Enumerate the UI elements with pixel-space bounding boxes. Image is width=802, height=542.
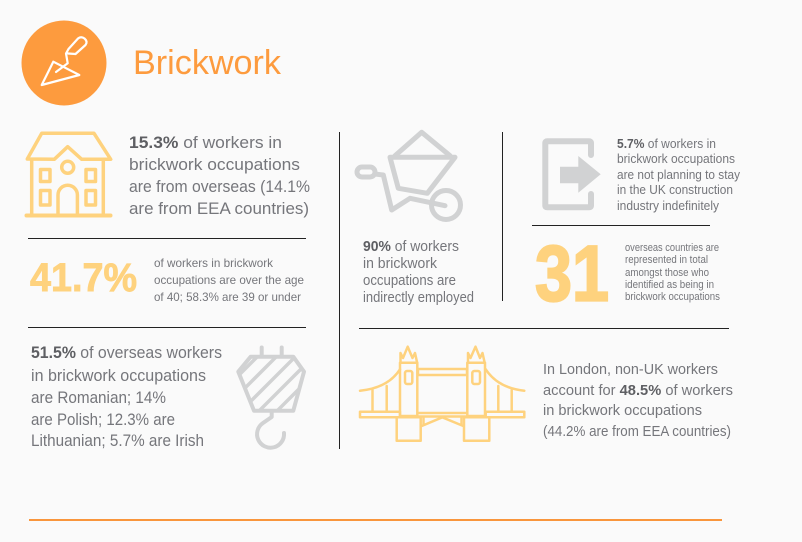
- text: age over 40: of 40; 58.3% are 39 or under: [154, 290, 301, 304]
- text: London non-UK workers: (44.2% are from EEA countries): [543, 424, 731, 440]
- text: 5.7% not staying: in the UK construction: [617, 183, 733, 197]
- icon: exit arrow: [545, 141, 601, 207]
- text: 15.3% from overseas: are from EEA countries): [129, 200, 309, 218]
- text: 51.5% of overseas workers: [31, 343, 222, 450]
- text: 90% indirectly employed: occupations are: [363, 273, 456, 289]
- text: 5.7% not staying: are not planning to stay: [617, 168, 741, 182]
- panel: overseas countries: [535, 228, 720, 318]
- text: 90% indirectly employed: 90% of workers: [363, 239, 459, 255]
- big number 31: 31: [535, 228, 609, 318]
- text: 90% indirectly employed: [363, 239, 474, 306]
- text: 51.5% of overseas workers: 51.5% of overseas workers: [31, 343, 222, 362]
- text: London non-UK workers: In London, non-UK workers: [543, 362, 718, 378]
- text: London non-UK workers: [543, 362, 733, 440]
- text: 15.3% from overseas: 15.3% of workers in: [129, 134, 282, 152]
- icon: Tower Bridge: [360, 347, 524, 441]
- text: age over 40: occupations are over the age: [154, 273, 304, 287]
- text: countries represented: amongst those who: [625, 267, 709, 279]
- text: countries represented: [625, 242, 720, 303]
- text: countries represented: represented in total: [625, 254, 708, 266]
- text: 5.7% not staying: [617, 137, 741, 213]
- text: 90% indirectly employed: indirectly employed: [363, 290, 474, 306]
- panel: nationalities: [31, 343, 312, 450]
- text: countries represented: brickwork occupations: [625, 291, 720, 303]
- text: 5.7% not staying: industry indefinitely: [617, 199, 720, 213]
- text: 5.7% not staying: 5.7% of workers in: [617, 137, 716, 151]
- text: London non-UK workers: account for 48.5% of workers: [543, 383, 733, 399]
- panel: not planning to stay: [545, 137, 741, 213]
- text: 51.5% of overseas workers: are Polish; 12.3% are: [31, 410, 175, 429]
- icon: crane hook: [236, 348, 312, 448]
- panel: overseas workers: [26, 133, 310, 218]
- text: 5.7% not staying: brickwork occupations: [617, 152, 735, 166]
- panel: indirectly employed: [357, 132, 474, 306]
- text: 90% indirectly employed: in brickwork: [363, 256, 438, 272]
- text: London non-UK workers: in brickwork occupations: [543, 403, 702, 419]
- text: 51.5% of overseas workers: in brickwork occupations: [31, 366, 206, 385]
- text: countries represented: overseas countries are: [625, 242, 719, 254]
- big number 41.7%: 41.7%: [30, 256, 137, 300]
- text: 51.5% of overseas workers: are Romanian; 14%: [31, 388, 166, 407]
- header: [22, 20, 282, 106]
- panel: London: [360, 347, 733, 441]
- text: 15.3% from overseas: are from overseas (14.1%: [129, 178, 310, 196]
- icon: orange circle with trowel: [22, 20, 106, 106]
- text: 15.3% from overseas: [129, 134, 310, 218]
- text: age over 40: [154, 256, 304, 304]
- title: Brickwork: [133, 44, 282, 82]
- text: age over 40: of workers in brickwork: [154, 256, 274, 270]
- text: 15.3% from overseas: brickwork occupations: [129, 156, 300, 174]
- icon: house: [26, 133, 111, 216]
- text: 51.5% of overseas workers: Lithuanian; 5.7% are Irish: [31, 431, 204, 450]
- icon: wheelbarrow: [357, 132, 460, 220]
- text: countries represented: identified as being in: [625, 279, 714, 291]
- panel: age split: [30, 256, 304, 304]
